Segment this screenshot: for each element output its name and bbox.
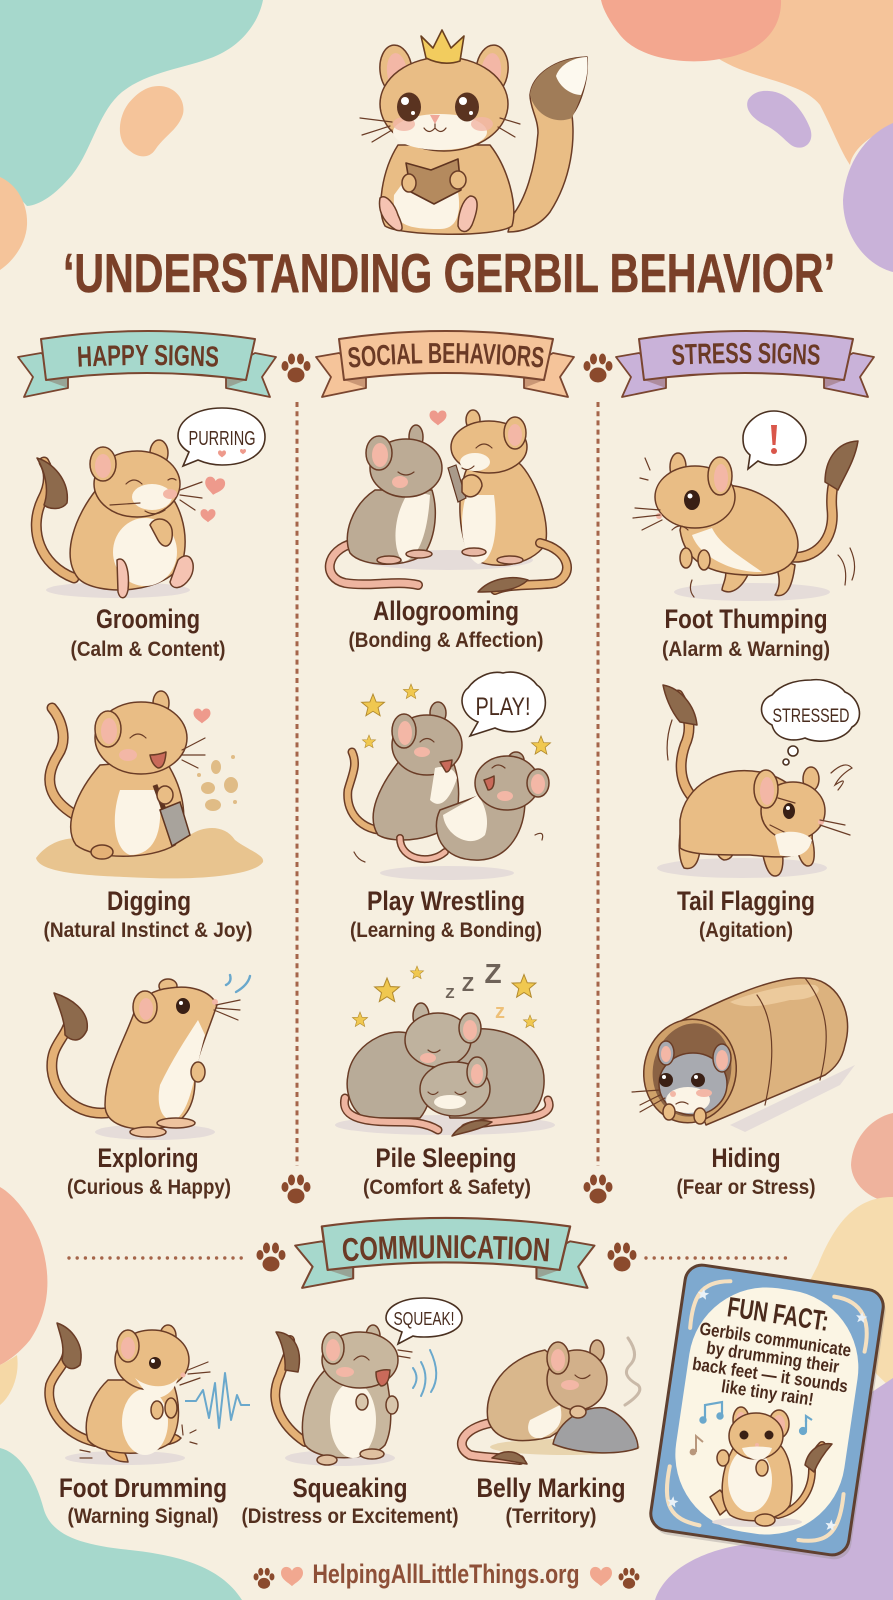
fun fact text: Gerbils communicate: [698, 1318, 853, 1361]
banner: communication: [294, 1216, 596, 1289]
label: foot drumming: (Warning Signal): [68, 1505, 218, 1528]
label: allogrooming: [348, 596, 544, 652]
thought bubble: stressed: STRESSED: [772, 706, 850, 727]
icon: paw right top: [584, 354, 612, 382]
fun fact text: FUN FACT:: [725, 1291, 831, 1337]
icon: heart: [194, 708, 210, 723]
speech bubble: play: PLAY!: [476, 693, 530, 721]
gerbil: digging: [36, 691, 263, 878]
music notes: [700, 1402, 812, 1434]
footer: HelpingAllLittleThings.org: [312, 1559, 580, 1589]
gerbil: grooming: [36, 408, 265, 598]
icon: paw left of communication: [256, 1242, 286, 1272]
sand crumbs: [197, 755, 238, 811]
icon: heart: [430, 410, 446, 425]
label: allogrooming: Allogrooming: [373, 596, 519, 626]
label: grooming: [70, 604, 226, 661]
gerbil: allogrooming: [330, 410, 567, 592]
icon: hearts: [200, 476, 226, 522]
label: tail flagging: (Agitation): [699, 919, 793, 942]
fun fact text: by drumming their: [705, 1338, 841, 1377]
fun fact text: [688, 1287, 859, 1414]
icon: crown: [421, 30, 464, 63]
sleep z letters: [445, 958, 505, 1023]
banner: happy signs: [17, 330, 277, 398]
scent wisps: [625, 1338, 640, 1405]
column divider left: [296, 402, 298, 1166]
banner: happy signs: HAPPY SIGNS: [78, 344, 218, 367]
icon: rock: [553, 1408, 638, 1453]
gerbil: belly marking: [462, 1338, 640, 1464]
label: exploring: Exploring: [98, 1143, 198, 1173]
hero gerbil with crown and book: [360, 30, 588, 234]
gerbil: foot thumping: [633, 411, 858, 601]
label: digging: [44, 886, 252, 942]
label: pile sleeping: [363, 1143, 531, 1199]
sound arcs: [413, 1350, 436, 1396]
banner: social behaviors: SOCIAL BEHAVIORS: [348, 343, 544, 368]
label: allogrooming: (Bonding & Affection): [348, 629, 544, 652]
label: play wrestling: [350, 886, 542, 942]
fun fact card: [648, 1263, 888, 1562]
fun fact text: back feet — it sounds: [691, 1354, 849, 1396]
label: pile sleeping: Pile Sleeping: [376, 1143, 516, 1173]
dotted line right of communication: [646, 1256, 792, 1260]
label: foot thumping: Foot Thumping: [664, 604, 828, 634]
speech bubble: play: [462, 672, 545, 736]
label: squeaking: [242, 1473, 458, 1528]
speech bubble: squeak: SQUEAK!: [394, 1309, 454, 1329]
label: play wrestling: (Learning & Bonding): [350, 919, 542, 942]
label: exploring: (Curious & Happy): [67, 1176, 231, 1199]
sleep z letters: Z: [445, 985, 455, 1002]
icon: curiosity marks: [226, 975, 250, 992]
label: grooming: Grooming: [96, 604, 200, 634]
label: squeaking: (Distress or Excitement): [242, 1505, 458, 1528]
label: play wrestling: Play Wrestling: [367, 886, 525, 916]
dotted line left of communication: [69, 1256, 248, 1260]
icon: paw right bottom: [584, 1174, 612, 1204]
waveform: [185, 1373, 250, 1428]
label: squeaking: Squeaking: [292, 1473, 408, 1503]
icon: open book: [406, 159, 461, 204]
banner: stress signs: STRESS SIGNS: [672, 342, 820, 365]
gerbil: play wrestling: [348, 672, 550, 880]
label: foot drumming: [59, 1473, 227, 1528]
fun fact text: like tiny rain!: [720, 1376, 815, 1410]
icon: stars: [352, 966, 537, 1028]
label: hiding: Hiding: [712, 1143, 780, 1173]
speech bubble: squeak: [386, 1298, 462, 1344]
banner: stress signs: [615, 330, 875, 398]
sand mound: [36, 828, 263, 878]
label: hiding: (Fear or Stress): [676, 1176, 816, 1199]
gerbil: singing in card: [690, 1402, 832, 1527]
column divider right: [596, 402, 600, 1166]
gerbils: pile sleeping: [335, 958, 555, 1136]
label: tail flagging: [677, 886, 815, 942]
gerbil: squeaking: [275, 1298, 462, 1466]
label: foot thumping: [662, 604, 830, 661]
label: exploring: [67, 1143, 231, 1199]
label: belly marking: Belly Marking: [476, 1473, 626, 1503]
banner: communication: COMMUNICATION: [342, 1235, 550, 1262]
label: grooming: (Calm & Content): [70, 638, 226, 661]
icon: paw left top: [282, 354, 310, 382]
gerbil: foot drumming: [49, 1323, 250, 1465]
label: tail flagging: Tail Flagging: [677, 886, 815, 916]
banner: social behaviors: [315, 330, 575, 398]
sleep z letters: z: [495, 1001, 505, 1023]
thought bubble: alert: [743, 411, 806, 469]
label: digging: (Natural Instinct & Joy): [44, 919, 252, 942]
sleep z letters: Z: [484, 958, 502, 989]
icon: paw right of communication: [608, 1242, 636, 1272]
label: belly marking: (Territory): [506, 1505, 596, 1528]
gerbil: hiding in tube: [632, 978, 855, 1132]
speech bubble: purring: PURRING: [188, 428, 256, 450]
label: foot drumming: Foot Drumming: [59, 1473, 227, 1503]
icon: shovel: [155, 785, 190, 846]
sleep z letters: Z: [462, 974, 474, 996]
thought bubble: stressed: [762, 680, 859, 741]
label: pile sleeping: (Comfort & Safety): [363, 1176, 531, 1199]
label: foot thumping: (Alarm & Warning): [662, 638, 830, 661]
label: belly marking: [476, 1473, 626, 1528]
gerbil: exploring: [52, 975, 250, 1140]
icon: paw left bottom: [282, 1174, 310, 1204]
speech bubble: purring: [178, 408, 265, 466]
label: digging: Digging: [107, 886, 191, 916]
label: hiding: [676, 1143, 816, 1199]
icon: comb: [448, 465, 466, 502]
icon: stars: [362, 684, 550, 754]
gerbil: tail flagging: [657, 680, 859, 878]
